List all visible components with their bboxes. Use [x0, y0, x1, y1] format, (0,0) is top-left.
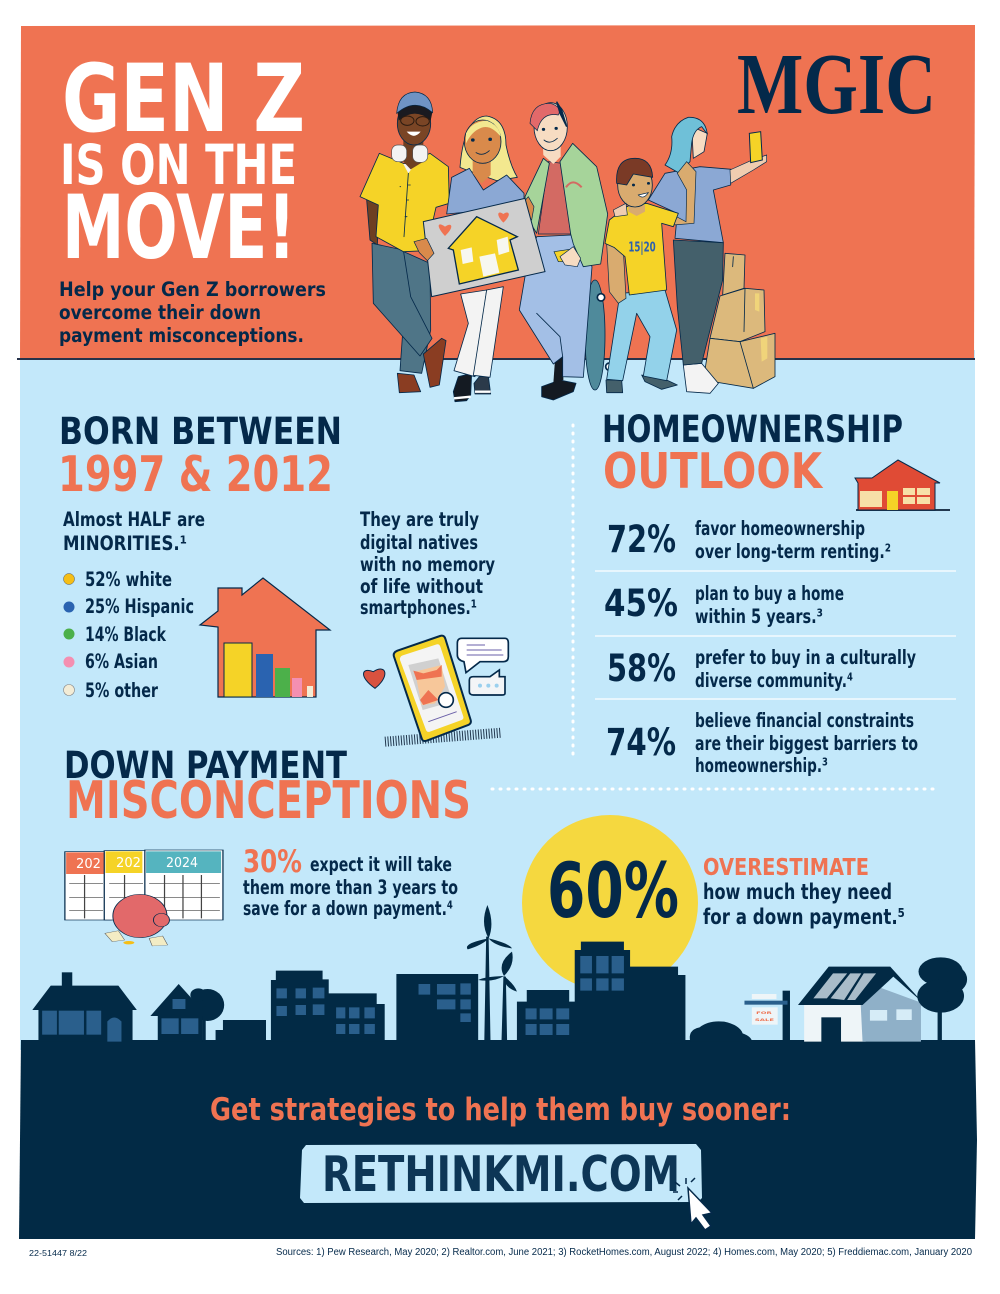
- legend: demographic percentages: [64, 568, 194, 702]
- person: woman with blue hair taking selfie: [648, 117, 767, 393]
- icon: calendars and piggy bank: [65, 850, 223, 946]
- stat: 72 percent: 72%: [607, 518, 676, 561]
- subtitle: Help your Gen Z borrowers: [59, 278, 326, 301]
- title: MOVE!: [62, 176, 296, 279]
- heading: down payment misconceptions: [64, 744, 471, 831]
- subtitle: [59, 278, 326, 347]
- for sale sign: [744, 991, 790, 1042]
- bush: [690, 1021, 752, 1042]
- text: overestimate: how much they need: [703, 880, 892, 905]
- legend: demographic percentages: 25% Hispanic: [85, 595, 194, 618]
- text: overestimate: [703, 855, 905, 930]
- title: IS ON THE: [60, 133, 297, 197]
- text labels on calendars: [76, 856, 198, 872]
- text: 30 percent expect: them more than 3 years to: [243, 876, 458, 899]
- stat: 58 percent: 58%: [607, 647, 676, 690]
- stat: 74 percent: are their biggest barriers to: [695, 732, 918, 755]
- poster with yellow house and hearts: [414, 198, 545, 297]
- stat: 74 percent: believe financial constraints: [695, 709, 914, 732]
- text: almost half are minorities: Almost HALF are: [63, 508, 205, 531]
- text: almost half are minorities: [63, 508, 205, 555]
- stat: 74 percent: 74%: [606, 721, 676, 764]
- person: woman with blue hoodie: [447, 116, 524, 402]
- house with solar panels: [798, 967, 923, 1042]
- house silhouette two with tree: [150, 984, 224, 1042]
- text: digital natives: digital natives: [360, 531, 478, 554]
- heading: born between: [58, 410, 342, 503]
- person: young man in green jacket: [517, 102, 608, 400]
- stat: 74 percent: homeownership.³: [695, 754, 828, 777]
- wind turbines: [467, 905, 517, 1040]
- heading: down payment misconceptions: MISCONCEPTIONS: [66, 771, 471, 831]
- heading: homeownership outlook: [602, 408, 903, 500]
- for sale sign: SALE: [755, 1018, 774, 1022]
- stat: 45 percent: 45%: [604, 582, 678, 625]
- icon: yellow sun circle: [522, 815, 698, 991]
- stat: 58 percent: prefer to buy in a culturally: [695, 646, 916, 669]
- text: 30 percent expect: 30%: [243, 844, 302, 880]
- text: overestimate: OVERESTIMATE: [703, 855, 869, 881]
- legend: demographic percentages: 14% Black: [85, 623, 167, 646]
- person: boy in yellow t-shirt: 15|20: [628, 241, 656, 256]
- subtitle: overcome their down: [59, 301, 261, 324]
- legend: demographic percentages: 5% other: [85, 679, 158, 702]
- text labels on calendars: 202: [116, 856, 141, 871]
- heading: down payment misconceptions: DOWN PAYMENT: [64, 744, 348, 787]
- text: 30 percent expect: expect it will take: [310, 853, 452, 876]
- title: GEN Z: [62, 45, 305, 154]
- text: 30 percent expect: [243, 844, 458, 920]
- boxes: [703, 253, 775, 388]
- stat: 45 percent: within 5 years.³: [695, 605, 823, 628]
- legend: demographic percentages: 52% white: [85, 568, 172, 591]
- text labels on calendars: 202: [76, 857, 101, 872]
- person: boy in yellow t-shirt: [605, 158, 696, 393]
- text: digital natives: They are truly: [360, 508, 479, 531]
- skateboard: [585, 280, 613, 390]
- stat: 58 percent: [607, 646, 916, 692]
- button: rethinkmi.com: RETHINKMI.COM: [322, 1146, 680, 1203]
- text: 30 percent expect: save for a down payment.⁴: [243, 897, 453, 920]
- stat: 58 percent: diverse community.⁴: [695, 669, 853, 692]
- heading: born between: BORN BETWEEN: [59, 410, 342, 453]
- heading: born between: 1997 & 2012: [58, 446, 333, 503]
- text: digital natives: with no memory: [360, 553, 495, 576]
- stat: 72 percent: over long-term renting.²: [695, 540, 891, 563]
- text: digital natives: of life without: [360, 575, 483, 598]
- heading: homeownership outlook: OUTLOOK: [603, 443, 824, 500]
- stat: 72 percent: favor homeownership: [695, 517, 865, 540]
- illustration: city skyline: [32, 905, 967, 1043]
- heading: homeownership outlook: HOMEOWNERSHIP: [602, 408, 903, 451]
- stat: 74 percent: [606, 709, 918, 777]
- icon: mouse cursor: [673, 1178, 712, 1230]
- illustration: group of five Gen Z people with boxes: [360, 92, 775, 402]
- logo: MGIC: MGIC: [737, 35, 936, 132]
- stat: 72 percent: [607, 517, 891, 563]
- house silhouette one: [32, 972, 137, 1042]
- text labels on calendars: 2024: [166, 856, 198, 871]
- text: digital natives: [360, 508, 495, 619]
- subtitle: payment misconceptions.: [59, 324, 304, 347]
- house bar chart: [200, 578, 330, 697]
- stat: 45 percent: [604, 582, 844, 628]
- panel: light blue background: [20, 350, 975, 1050]
- text: digital natives: smartphones.¹: [360, 596, 477, 619]
- text: overestimate: for a down payment.⁵: [703, 905, 905, 930]
- panel: navy footer block: [19, 1040, 977, 1239]
- person: man with headphones: [360, 92, 449, 393]
- icon: smartphone with cat, hearts and chat bubbles: [364, 636, 508, 742]
- tree: [917, 957, 967, 1042]
- call to action text: Get strategies to help them buy sooner:: [210, 1092, 791, 1128]
- footer: sources: Sources: 1) Pew Research, May 2020; 2) Realtor.com, June 2021; 3) RocketHomes.com, August 2022; 4) Homes.com, May 2020; 5) Freddiemac.com, January 2020: [276, 1247, 972, 1258]
- stat: 45 percent: plan to buy a home: [695, 582, 844, 605]
- office buildings: [216, 942, 685, 1043]
- text: almost half are minorities: MINORITIES.¹: [63, 532, 187, 555]
- panel: orange header: [17, 25, 975, 359]
- icon: red house: [855, 460, 950, 510]
- stat: 60 percent: 60%: [547, 846, 679, 935]
- footer: job number: 22-51447 8/22: [29, 1248, 87, 1258]
- legend: demographic percentages: 6% Asian: [85, 650, 158, 673]
- title: [60, 45, 305, 279]
- for sale sign: FOR: [756, 1011, 773, 1015]
